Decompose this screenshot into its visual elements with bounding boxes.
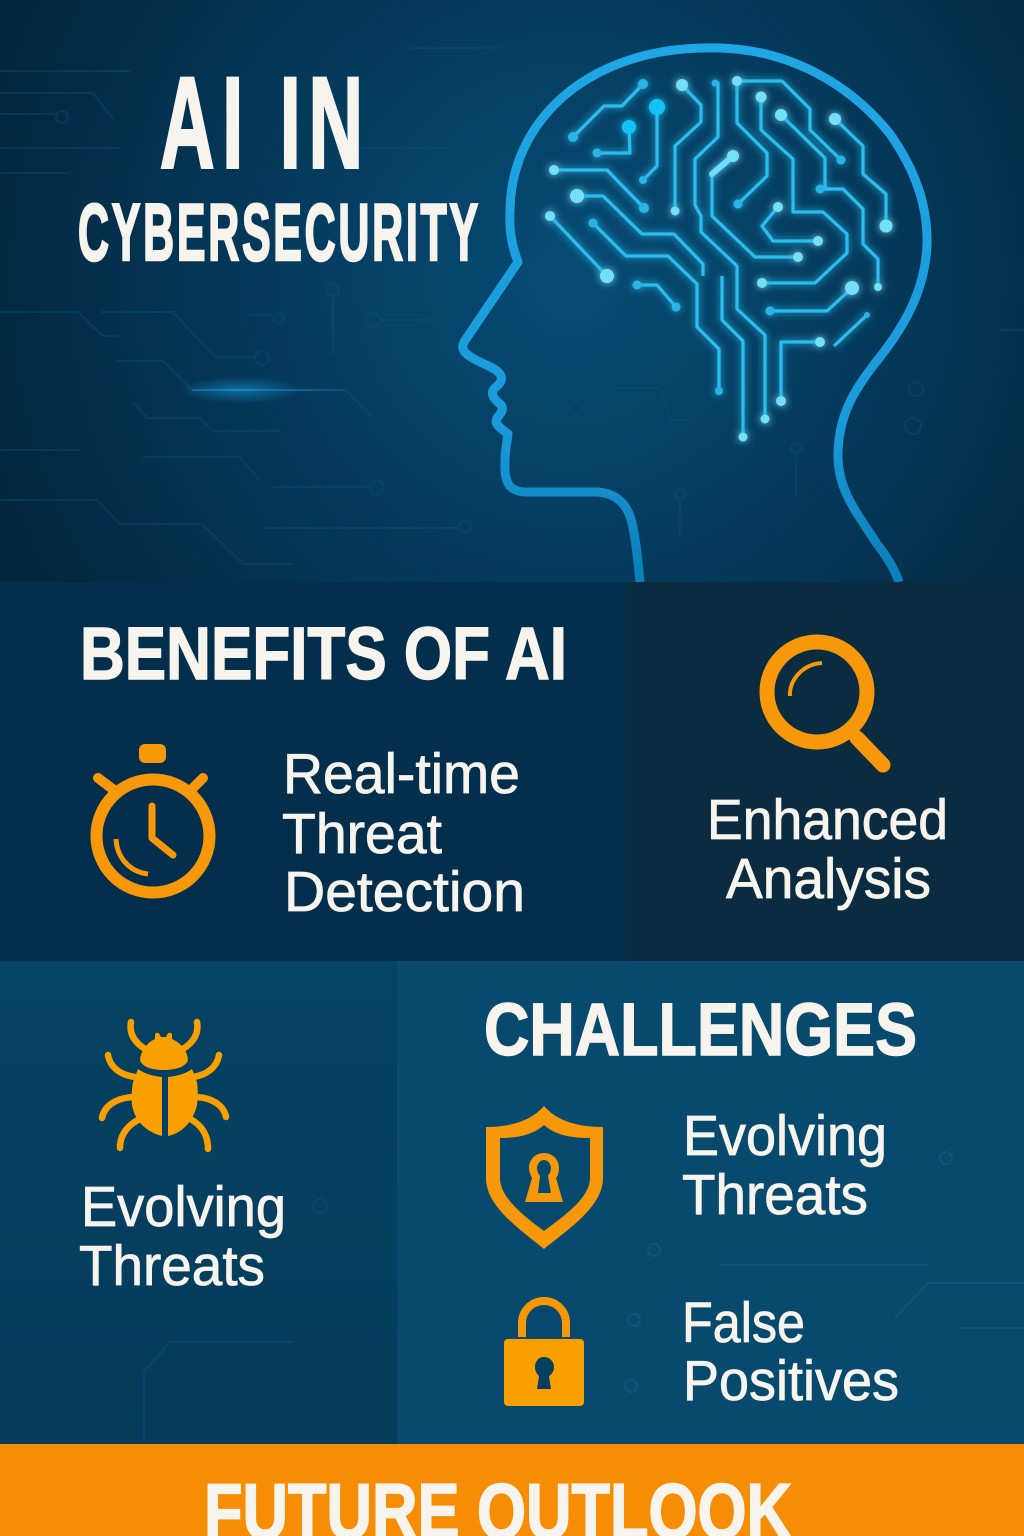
panel: hero background bbox=[0, 0, 1024, 582]
heading: challenges: CHALLENGES bbox=[484, 988, 917, 1071]
icon: head outline with circuit brain bbox=[463, 48, 927, 582]
panel: evolving threats bbox=[0, 961, 397, 1444]
text: enhanced analysis bbox=[707, 788, 948, 911]
text: false positives: Positives bbox=[683, 1349, 899, 1413]
icon: stopwatch bbox=[96, 744, 210, 892]
panel: benefits of AI bbox=[0, 582, 628, 961]
text: real-time threat detection: Real-time bbox=[283, 742, 520, 806]
icon: bug bbox=[102, 1022, 226, 1149]
text: evolving threats: Threats bbox=[79, 1234, 265, 1298]
text: evolving threats: Evolving bbox=[683, 1104, 887, 1168]
text: evolving threats: Evolving bbox=[81, 1175, 286, 1239]
icon: magnifying glass bbox=[767, 642, 883, 765]
text: evolving threats bbox=[79, 1175, 286, 1298]
icon: padlock bbox=[504, 1301, 584, 1406]
text: enhanced analysis: Enhanced bbox=[707, 788, 948, 852]
text: real-time threat detection: Threat bbox=[282, 802, 442, 866]
title: AI IN bbox=[160, 50, 363, 196]
icon: shield with keyhole bbox=[486, 1106, 603, 1249]
text: real-time threat detection bbox=[282, 742, 525, 924]
text: evolving threats bbox=[682, 1104, 887, 1227]
text: false positives bbox=[682, 1291, 899, 1413]
panel: enhanced analysis bbox=[628, 582, 1024, 961]
title bbox=[78, 50, 478, 277]
text: real-time threat detection: Detection bbox=[284, 860, 525, 924]
panel: future outlook banner bbox=[0, 1444, 1024, 1536]
text: false positives: False bbox=[682, 1291, 805, 1355]
panel: challenges bbox=[397, 961, 1024, 1444]
text: evolving threats: Threats bbox=[682, 1163, 868, 1227]
text: enhanced analysis: Analysis bbox=[726, 847, 931, 911]
title: CYBERSECURITY bbox=[78, 186, 478, 277]
heading: benefits: BENEFITS OF AI bbox=[80, 612, 567, 695]
